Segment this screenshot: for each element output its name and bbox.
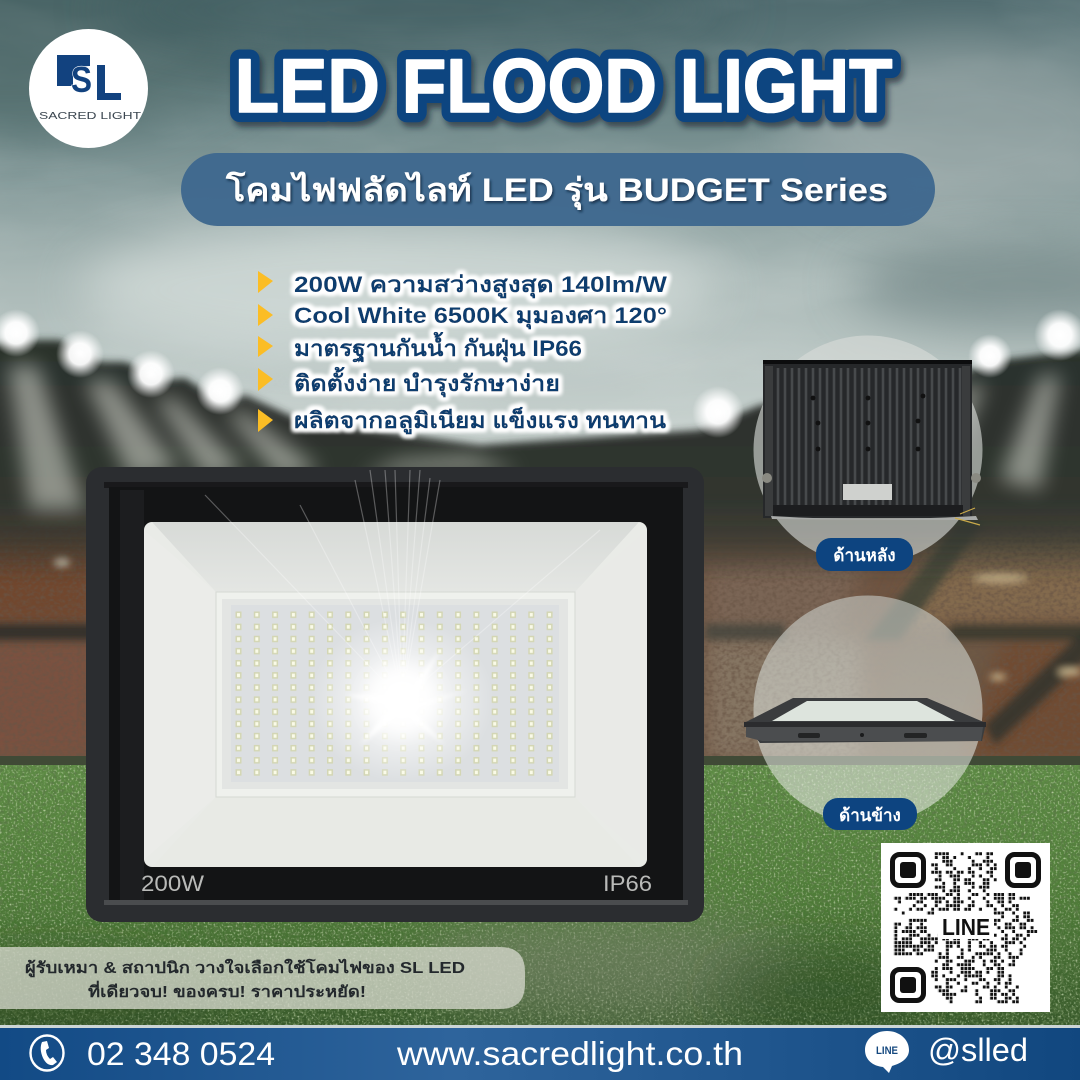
- feature 2: Cool White 6500K มุมองศา 120°: [294, 303, 667, 330]
- feature 1: 200W ความสว่างสูงสุด 140lm/W: [294, 272, 668, 299]
- QR center word: LINE: [942, 914, 990, 940]
- side of lamp: [744, 698, 986, 743]
- sky: [0, 0, 1080, 500]
- stadium roof: [0, 340, 1080, 580]
- feature 5: ผลิตจากอลูมิเนียม แข็งแรง ทนทาน: [294, 406, 667, 435]
- stadium lights: [0, 309, 1080, 438]
- title: LED: [235, 43, 380, 128]
- logo: Sacred Light: SACRED LIGHT: [39, 111, 141, 122]
- stands: [0, 480, 1080, 763]
- title: LED: [235, 43, 380, 128]
- tagline pill: ที่เดียวจบ! ของครบ! ราคาประหยัด!: [88, 980, 366, 1001]
- icon: LINE: [865, 1031, 909, 1073]
- tagline pill: ผู้รับเหมา & สถาปนิก วางใจเลือกใช้โคมไฟของ SL LED: [25, 958, 465, 979]
- model labels: 200W: [141, 871, 204, 896]
- icon: LINE: LINE: [876, 1045, 898, 1057]
- feature 4: ติดตั้งง่าย บำรุงรักษาง่าย: [294, 366, 560, 398]
- title: FLOOD: [402, 44, 657, 128]
- feature 3: มาตรฐานกันน้ำ กันฝุ่น IP66: [294, 331, 582, 363]
- floodlight product, front view: [86, 467, 704, 922]
- label: side: [823, 798, 917, 830]
- logo: Sacred Light: [29, 29, 148, 148]
- LINE handle: @slled: [928, 1032, 1028, 1068]
- QR finder patterns: [892, 854, 1038, 1000]
- phone number: 02 348 0524: [87, 1036, 275, 1072]
- LED board: [216, 592, 575, 797]
- subtitle pill: [181, 153, 935, 226]
- title: [235, 43, 892, 129]
- logo: Sacred Light: S: [71, 59, 92, 100]
- website: www.sacredlight.co.th: [396, 1035, 743, 1072]
- QR code: LINE: [881, 843, 1050, 1012]
- icon: phone: [30, 1036, 64, 1070]
- label: side: ด้านข้าง: [839, 806, 901, 825]
- feature 3: [258, 331, 582, 363]
- feature 4: [258, 366, 560, 398]
- subtitle pill: โคมไฟฟลัดไลท์ LED รุ่น BUDGET Series: [225, 171, 888, 211]
- feature 1: [258, 271, 668, 299]
- model labels: IP66: [603, 871, 652, 896]
- light flare: [310, 618, 494, 782]
- model labels: [141, 871, 652, 896]
- QR modules: [890, 854, 1041, 1002]
- feature list: [258, 271, 668, 435]
- title: LIGHT: [680, 43, 892, 129]
- reflector: [144, 522, 647, 867]
- back view callout: [754, 336, 982, 571]
- lamp housing: [86, 467, 704, 922]
- title: LIGHT: [680, 43, 892, 129]
- footer contact bar: [0, 1025, 1080, 1080]
- floodlight beams: [8, 365, 1060, 510]
- label: back: [816, 538, 913, 571]
- label: back: ด้านหลัง: [833, 546, 896, 565]
- title: FLOOD: [402, 44, 657, 128]
- side view callout: [744, 596, 986, 830]
- rear of lamp: [762, 360, 981, 525]
- light rays over housing: [205, 470, 600, 700]
- tagline pill: [0, 947, 525, 1009]
- grass field: [0, 756, 1080, 1040]
